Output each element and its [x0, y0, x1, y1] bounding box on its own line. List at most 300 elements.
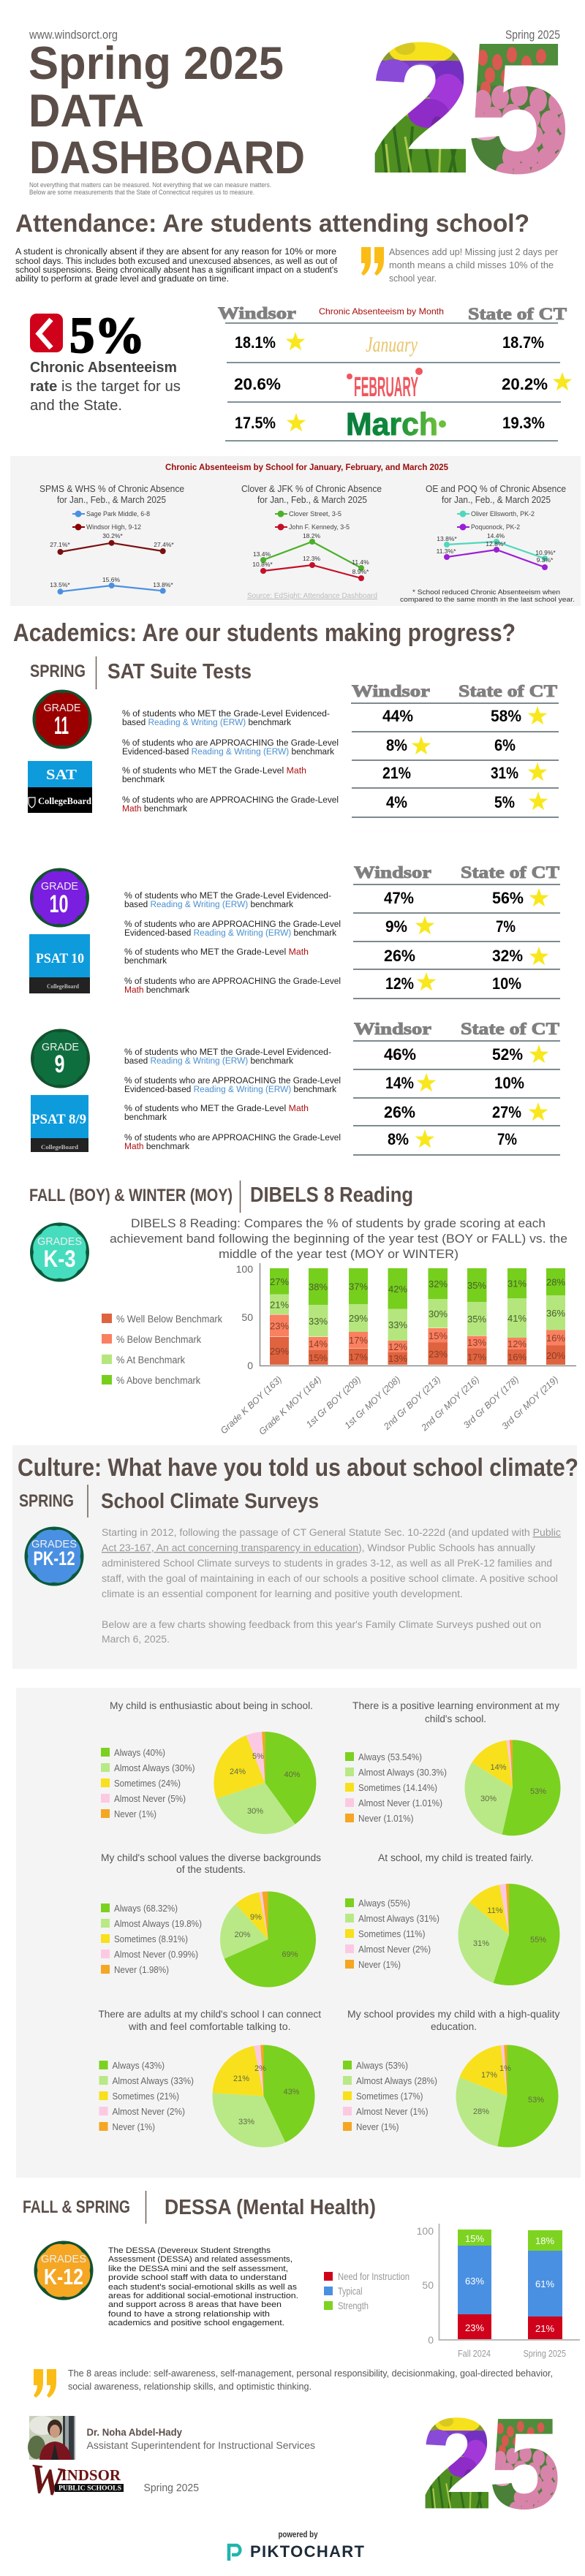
pie chart: diverse backgrounds: Never (1.98%) — [114, 1964, 169, 1975]
table: grade 11 results: 4% — [386, 793, 407, 811]
subheading: DESSA: DESSA (Mental Health) — [165, 2196, 376, 2219]
badge: grade 10 — [30, 868, 89, 927]
subheading: DIBELS: FALL (BOY) & WINTER (MOY) — [29, 1186, 233, 1205]
table: grade 10 results: 26% — [384, 947, 415, 965]
panel: chronic absenteeism by school — [10, 456, 581, 606]
eight areas callout: social awareness, relationship skills, and optimistic thinking. — [68, 2381, 312, 2392]
panel: five percent target — [30, 308, 181, 414]
issue date: Spring 2025 — [505, 28, 560, 42]
subtitle note — [29, 181, 271, 197]
author name: Dr. Noha Abdel-Hady — [86, 2426, 182, 2438]
row: January: 18.1% — [235, 333, 276, 352]
stacked bar chart: DIBELS: 1st Gr BOY (209) — [304, 1374, 363, 1430]
benchmark descriptions: grade 10 — [124, 892, 341, 995]
pie chart: treated fairly: At school, my child is treated fairly. — [378, 1852, 534, 1863]
table: grade 11 results: Windsor — [352, 682, 430, 700]
badge: grade 10: GRADE — [41, 880, 78, 893]
stacked bar chart: DIBELS: 3rd Gr BOY (178) — [461, 1374, 521, 1431]
footnote: * School reduced Chronic Absenteeism when — [412, 588, 560, 596]
table: grade 9 results: 14% — [385, 1074, 414, 1092]
pie chart: high-quality education: Never (1%) — [356, 2121, 399, 2132]
line chart: SPMS and WHS: 27.4%* — [154, 541, 174, 548]
stacked bar chart: DIBELS: 37% — [349, 1281, 368, 1292]
school climate paragraph — [102, 1527, 561, 1645]
benchmark descriptions: grade 11: benchmark — [122, 776, 165, 784]
table: grade 11 results: 21% — [382, 764, 411, 782]
table: grade 9 results: 7% — [497, 1130, 517, 1148]
attendance definition paragraph — [15, 248, 338, 284]
subheading: school climate — [19, 1485, 319, 1518]
stacked bar chart: DIBELS: Grade K MOY (164) — [257, 1374, 323, 1437]
row: January: January — [366, 333, 418, 357]
pie chart: enthusiastic: 5% — [252, 1752, 264, 1761]
badge: grades PK-12: PK-12 — [34, 1548, 75, 1569]
pie chart: diverse backgrounds: of the students. — [176, 1864, 246, 1875]
line chart: OE and POQ: 12.8%* — [486, 540, 506, 548]
pie chart: high-quality education: Always (53%) — [356, 2060, 408, 2071]
title: DATA — [29, 86, 144, 137]
DIBELS description: achievement band following the beginning of the year test (BOY or FALL) vs. the — [110, 1232, 567, 1246]
stacked bar chart: DIBELS: 27% — [270, 1276, 289, 1287]
footnote: compared to the same month in the last school year. — [400, 596, 575, 604]
attendance definition paragraph: school days. This includes both excused and unexcused absences, as well as out of — [15, 257, 338, 266]
table header: State of CT — [468, 305, 567, 323]
line chart: SPMS and WHS: Windsor High, 9-12 — [86, 523, 141, 531]
attendance definition paragraph: school suspensions. Being chronically absent has a significant impact on a student's — [15, 266, 338, 275]
pie chart: treated fairly — [345, 1852, 546, 1970]
line chart: SPMS and WHS: 30.2%* — [102, 532, 123, 539]
panel title: Chronic Absenteeism by School for January, February, and March 2025 — [165, 462, 448, 472]
chart legend: DIBELS bands — [102, 1314, 222, 1386]
stacked bar chart: DIBELS: 2nd Gr MOY (216) — [419, 1374, 481, 1433]
table: grade 10 results: 7% — [496, 917, 516, 936]
chart legend: DIBELS bands: % Above benchmark — [116, 1375, 200, 1386]
subheading: DIBELS: DIBELS 8 Reading — [250, 1183, 413, 1207]
website url: www.windsorct.org — [29, 28, 118, 42]
benchmark descriptions: grade 11: % of students who MET the Grade-Level Evidenced- — [122, 710, 330, 719]
line chart: OE and POQ: 14.4% — [487, 532, 505, 539]
DESSA description: each student's social-emotional skills as well as — [108, 2283, 297, 2292]
benchmark descriptions: grade 10: Math benchmark — [124, 986, 189, 995]
heading: academics: Academics: Are our students making progress? — [13, 619, 516, 647]
pie chart: enthusiastic: Sometimes (24%) — [114, 1778, 181, 1789]
table: grade 9 results: 46% — [384, 1045, 416, 1064]
stacked bar chart: DIBELS: 16% — [507, 1352, 526, 1363]
pie chart: high-quality education: 28% — [473, 2107, 489, 2116]
stacked bar chart: DESSA: 63% — [465, 2276, 484, 2287]
table: chronic absenteeism by month — [218, 304, 572, 442]
line chart: OE and POQ: 9.3%* — [537, 556, 554, 564]
logo: PSAT 10: PSAT 10 — [36, 951, 84, 966]
pie chart: diverse backgrounds: Always (68.32%) — [114, 1903, 178, 1914]
pie chart: learning environment: 53% — [530, 1787, 546, 1796]
line chart: Clover and JFK: for Jan., Feb., & March 2025 — [257, 495, 367, 505]
line chart: Clover and JFK: 18.2% — [303, 532, 320, 539]
chart legend: DIBELS bands: % At Benchmark — [116, 1355, 185, 1365]
pie chart: trusted adults: Never (1%) — [113, 2121, 155, 2132]
chart legend: DESSA: Need for Instruction — [338, 2271, 410, 2282]
line chart: OE and POQ: 10.9%* — [535, 549, 556, 556]
pie chart: enthusiastic: 40% — [284, 1770, 301, 1779]
line chart: Clover and JFK: 13.4% — [253, 550, 271, 558]
table: grade 11 results: State of CT — [458, 682, 557, 700]
logo: PSAT 8/9: PSAT 8/9 — [31, 1112, 86, 1127]
footer date: Spring 2025 — [143, 2482, 199, 2494]
stacked bar chart: DIBELS: 36% — [546, 1308, 565, 1319]
chart legend: DIBELS bands: % Below Benchmark — [116, 1334, 201, 1345]
badge: grade 9: 9 — [54, 1050, 64, 1078]
icon: less-than badge — [30, 314, 63, 352]
pie chart: trusted adults: Almost Always (33%) — [113, 2075, 194, 2086]
row: March — [235, 406, 545, 442]
row: February — [234, 368, 572, 403]
logo: PSAT 10: CollegeBoard — [47, 982, 79, 990]
line chart: SPMS and WHS: Sage Park Middle, 6-8 — [86, 510, 150, 518]
stacked bar chart: DIBELS: 16% — [546, 1333, 565, 1344]
pie chart: enthusiastic: Never (1%) — [114, 1808, 156, 1819]
logo: Windsor Public Schools: INDSOR — [61, 2466, 121, 2484]
line chart: Clover and JFK: Clover Street, 3-5 — [289, 510, 341, 518]
benchmark descriptions: grade 11 — [122, 710, 339, 814]
school climate paragraph: staff, with the goal of maintaining in each of our schools a positive school climate. A positive school — [102, 1573, 558, 1584]
pie chart: trusted adults: 43% — [283, 2088, 300, 2096]
school climate paragraph: Starting in 2012, following the passage of CT General Statute Sec. 10-222d (and updated with Public — [102, 1527, 561, 1538]
logo: PSAT 10 — [29, 934, 90, 993]
eight areas callout — [68, 2368, 553, 2392]
pie chart: enthusiastic: Always (40%) — [114, 1747, 165, 1758]
school climate paragraph: Below are a few charts showing feedback from this year's Family Climate Surveys pushed out on — [102, 1619, 541, 1630]
pie chart: enthusiastic: 30% — [247, 1807, 263, 1816]
DESSA description: The DESSA (Devereux Student Strengths — [108, 2246, 271, 2255]
target text — [30, 360, 181, 414]
table: grade 10 results: State of CT — [461, 863, 559, 882]
pie chart: learning environment: Almost Always (30.3%) — [358, 1767, 447, 1778]
heading: attendance: Attendance: Are students attending school? — [15, 210, 529, 238]
stacked bar chart: DIBELS: 3rd Gr MOY (219) — [499, 1374, 560, 1431]
benchmark descriptions: grade 11: based Reading & Writing (ERW) benchmark — [122, 719, 291, 727]
table: grade 11 results: 31% — [491, 764, 518, 782]
pie chart: treated fairly: Never (1%) — [358, 1959, 401, 1970]
school climate paragraph: March 6, 2025. — [102, 1634, 170, 1645]
panel: family survey pie charts — [16, 1688, 581, 2178]
title: Spring 2025 — [29, 38, 284, 89]
line chart: OE and POQ: 11.3%* — [437, 548, 456, 555]
footnote — [400, 588, 575, 604]
badge: grade 9: GRADE — [42, 1041, 79, 1053]
pie chart: treated fairly: 31% — [473, 1939, 489, 1948]
DESSA description: like the DESSA mini and the self assessment, — [108, 2265, 288, 2273]
pie chart: trusted adults — [98, 2009, 321, 2132]
table: grade 10 results: 47% — [384, 889, 414, 907]
stacked bar chart: DIBELS: 17% — [349, 1352, 368, 1363]
eight areas callout: The 8 areas include: self-awareness, self-management, personal responsibility, decisionmaking, goal-directed behavior, — [68, 2368, 553, 2379]
pie chart: diverse backgrounds: Almost Never (0.99%) — [114, 1949, 198, 1960]
stacked bar chart: DIBELS: 0 — [247, 1360, 253, 1371]
benchmark descriptions: grade 10: based Reading & Writing (ERW) benchmark — [124, 901, 293, 909]
flower-filled numeral 25, footer: 2 — [422, 2393, 493, 2534]
table: grade 9 results: 52% — [492, 1045, 523, 1064]
row: February: 20.6% — [234, 375, 281, 393]
badge: grade 11: 11 — [54, 712, 69, 740]
pie chart: diverse backgrounds: 69% — [282, 1950, 298, 1959]
benchmark descriptions: grade 11: % of students who are APPROACHING the Grade-Level — [122, 739, 339, 748]
table: grade 9 results: 27% — [492, 1103, 521, 1121]
table: grade 9 results: 8% — [388, 1130, 409, 1148]
subheading: DESSA: FALL & SPRING — [23, 2197, 130, 2217]
stacked bar chart: DESSA: 100 — [417, 2225, 434, 2237]
badge: grade 11: GRADE — [44, 702, 80, 714]
pie chart: trusted adults: with and feel comfortable talking to. — [128, 2021, 291, 2032]
badge: grade 10: 10 — [50, 890, 69, 918]
line chart: SPMS and WHS: 15.6% — [102, 576, 120, 583]
subheading: DESSA — [23, 2191, 376, 2224]
benchmark descriptions: grade 9: % of students who are APPROACHING the Grade-Level — [124, 1134, 341, 1143]
line chart: OE and POQ: OE and POQ % of Chronic Absence — [426, 484, 566, 494]
line chart: OE and POQ: 13.8%* — [437, 535, 457, 542]
subtitle note: Not everything that matters can be measured. Not everything that we can measure matters. — [29, 181, 271, 189]
row: February: 20.2% — [502, 375, 548, 393]
stacked bar chart: DESSA: 18% — [535, 2235, 554, 2246]
pie chart: high-quality education: Sometimes (17%) — [356, 2091, 423, 2102]
pie chart: high-quality education: My school provides my child with a high-quality — [347, 2009, 560, 2020]
benchmark descriptions: grade 9: Evidenced-based Reading & Writing (ERW) benchmark — [124, 1086, 336, 1094]
powered by Piktochart — [229, 2531, 365, 2561]
pie chart: high-quality education: 17% — [481, 2071, 497, 2080]
pie chart: trusted adults: 21% — [233, 2075, 249, 2083]
pie chart: treated fairly: Almost Never (2%) — [358, 1944, 431, 1955]
source link: Source: EdSight: Attendance Dashboard — [247, 592, 377, 600]
stacked bar chart: DESSA: 23% — [465, 2322, 484, 2333]
attendance callout: Absences add up! Missing just 2 days per — [389, 246, 559, 257]
stacked bar chart: DIBELS: 12% — [388, 1341, 407, 1352]
flower-filled numeral 25, footer: 5 — [489, 2393, 560, 2534]
stacked bar chart: DIBELS: 13% — [388, 1353, 407, 1364]
pie chart: trusted adults: Sometimes (21%) — [113, 2091, 179, 2102]
benchmark descriptions: grade 10: % of students who MET the Grade-Level Evidenced- — [124, 892, 331, 901]
subheading: SAT suite: SAT Suite Tests — [107, 660, 252, 683]
benchmark descriptions: grade 10: % of students who MET the Grade-Level Math — [124, 948, 309, 957]
row: March: 19.3% — [502, 414, 545, 432]
benchmark descriptions: grade 11: Evidenced-based Reading & Writing (ERW) benchmark — [122, 748, 334, 757]
badge: grades PK-12 — [25, 1526, 83, 1586]
table: grade 10 results: 10% — [492, 974, 521, 993]
flower-filled numeral 25 — [370, 6, 569, 210]
badge: grade 11 — [32, 690, 92, 749]
logo: SAT College Board: SAT — [46, 767, 78, 783]
table: grade 10 results — [353, 863, 560, 999]
pie chart: learning environment — [345, 1700, 559, 1824]
pie chart: diverse backgrounds: Almost Always (19.8%) — [114, 1918, 202, 1929]
badge: grades K-3: GRADES — [37, 1235, 82, 1248]
stacked bar chart: DIBELS — [219, 1263, 576, 1437]
pie chart: learning environment: child's school. — [425, 1713, 486, 1724]
pie chart: trusted adults: Almost Never (2%) — [113, 2106, 185, 2117]
icon: quote mark — [361, 247, 384, 276]
attendance callout — [389, 246, 559, 284]
logo: Windsor Public Schools: PUBLIC SCHOOLS — [58, 2485, 121, 2493]
logo: Windsor Public Schools: W — [27, 2455, 67, 2505]
line chart: SPMS and WHS: 13.8%* — [153, 581, 173, 588]
table: grade 10 results: 9% — [385, 917, 407, 936]
author name: Assistant Superintendent for Instructional Services — [86, 2440, 315, 2451]
pie chart: diverse backgrounds: 9% — [250, 1913, 262, 1922]
DESSA description: provide school staff with data to understand — [108, 2273, 287, 2282]
stacked bar chart: DIBELS: 31% — [507, 1278, 526, 1289]
badge: grades K-3 — [30, 1222, 89, 1282]
DIBELS description — [110, 1216, 567, 1261]
stacked bar chart: DIBELS: 29% — [270, 1346, 289, 1357]
pie chart: treated fairly: Always (55%) — [358, 1898, 410, 1909]
subheading: SAT suite: SPRING — [30, 662, 86, 681]
stacked bar chart: DIBELS: 35% — [467, 1314, 486, 1325]
pie chart: learning environment: 30% — [480, 1795, 497, 1803]
DESSA description: areas for additional social-emotional instruction. — [108, 2292, 298, 2300]
row: February: FEBRUARY — [354, 372, 418, 403]
stacked bar chart: DIBELS: 41% — [507, 1313, 526, 1324]
line chart: Clover and JFK: 12.3% — [303, 555, 320, 562]
flower-filled numeral 25: 2 — [370, 6, 472, 210]
line chart: OE and POQ: for Jan., Feb., & March 2025 — [442, 495, 551, 505]
table: grade 10 results: 56% — [492, 889, 524, 907]
table: grade 9 results — [353, 1020, 560, 1155]
table: grade 9 results: Windsor — [354, 1020, 431, 1038]
line chart: OE and POQ: Poquonock, PK-2 — [471, 523, 520, 531]
table header — [218, 304, 567, 323]
title — [29, 38, 305, 183]
school climate paragraph: administered School Climate surveys to students in grades 3-12, as well as all PreK-12 families and — [102, 1558, 552, 1569]
row: March: March — [346, 406, 438, 442]
stacked bar chart: DIBELS: 42% — [388, 1284, 407, 1295]
target text: Chronic Absenteeism — [30, 360, 177, 376]
table header: Chronic Absenteeism by Month — [319, 306, 444, 317]
table header: Windsor — [218, 304, 296, 322]
line chart: SPMS and WHS: 13.5%* — [50, 581, 70, 588]
stacked bar chart: DESSA: 21% — [535, 2323, 554, 2334]
stacked bar chart: DESSA: 61% — [535, 2278, 554, 2289]
DESSA description: Assessment (DESSA) and related assessments, — [108, 2255, 292, 2264]
pie chart: enthusiastic — [101, 1700, 313, 1819]
chart legend: DIBELS bands: % Well Below Benchmark — [116, 1314, 222, 1325]
DIBELS description: DIBELS 8 Reading: Compares the % of students by grade scoring at each — [131, 1216, 546, 1230]
pie chart: learning environment: Almost Never (1.01%) — [358, 1797, 442, 1808]
subtitle note: Below are some measurements that the State of Connecticut requires us to measure. — [29, 189, 254, 197]
pie chart: enthusiastic: 24% — [230, 1768, 246, 1776]
badge: grades K-3: K-3 — [44, 1246, 76, 1272]
pie chart: diverse backgrounds: 20% — [234, 1931, 251, 1939]
line chart: SPMS and WHS: 27.1%* — [50, 541, 70, 548]
logo: PSAT 8/9: CollegeBoard — [41, 1143, 78, 1151]
pie chart: diverse backgrounds: My child's school values the diverse backgrounds — [101, 1852, 321, 1863]
badge: grades K-12 — [34, 2241, 94, 2300]
benchmark descriptions: grade 9: based Reading & Writing (ERW) benchmark — [124, 1057, 293, 1066]
pie chart: diverse backgrounds — [101, 1852, 321, 1975]
pie chart: high-quality education: 1% — [499, 2064, 511, 2073]
badge: grade 9 — [31, 1029, 90, 1088]
stacked bar chart: DESSA: Spring 2025 — [524, 2349, 566, 2359]
benchmark descriptions: grade 9: % of students who are APPROACHING the Grade-Level — [124, 1077, 341, 1086]
powered by Piktochart: powered by — [278, 2531, 318, 2539]
line chart: OE and POQ: Oliver Ellsworth, PK-2 — [471, 510, 535, 518]
panel: culture section — [12, 1445, 578, 1669]
pie chart: high-quality education: Almost Never (1%) — [356, 2106, 429, 2117]
DESSA description: academics and positive school engagement. — [108, 2319, 284, 2327]
stacked bar chart: DIBELS: 28% — [546, 1276, 565, 1288]
logo: SAT College Board: CollegeBoard — [38, 795, 92, 806]
table: grade 11 results: 8% — [386, 736, 407, 754]
line chart: SPMS and WHS: for Jan., Feb., & March 2025 — [57, 495, 166, 505]
pie chart: treated fairly: Sometimes (11%) — [358, 1928, 426, 1939]
pie chart: enthusiastic: Almost Always (30%) — [114, 1762, 195, 1773]
line chart: SPMS and WHS — [39, 484, 184, 594]
stacked bar chart: DESSA: 50 — [422, 2279, 434, 2291]
attendance callout: month means a child misses 10% of the — [389, 260, 554, 270]
badge: grades PK-12: GRADES — [31, 1538, 77, 1550]
line chart: Clover and JFK: 8.9%* — [352, 568, 369, 575]
pie chart: enthusiastic: Almost Never (5%) — [114, 1793, 186, 1804]
attendance callout: school year. — [389, 273, 437, 284]
stacked bar chart: DIBELS: 12% — [507, 1338, 526, 1349]
pie chart: high-quality education: 53% — [528, 2096, 544, 2105]
stacked bar chart: DIBELS: 2nd Gr BOY (213) — [381, 1374, 442, 1432]
pie chart: learning environment: Always (53.54%) — [358, 1751, 422, 1762]
school climate paragraph: Act 23-167, An act concerning transparency in education ), Windsor Public Schools has annually — [102, 1542, 535, 1553]
pie chart: learning environment: Sometimes (14.14%) — [358, 1782, 437, 1793]
stacked bar chart: DIBELS: Grade K BOY (163) — [219, 1374, 284, 1436]
stacked bar chart: DIBELS: 21% — [270, 1300, 289, 1310]
DIBELS description: middle of the year test (MOY or WINTER) — [219, 1247, 458, 1261]
school climate paragraph: climate is an essential component for learning and positive youth development. — [102, 1588, 463, 1599]
row: March: 17.5% — [235, 414, 276, 432]
benchmark descriptions: grade 10: benchmark — [124, 957, 167, 966]
pie chart: enthusiastic: My child is enthusiastic about being in school. — [110, 1700, 313, 1711]
stacked bar chart: DIBELS: 33% — [388, 1319, 407, 1330]
table: grade 9 results: State of CT — [461, 1020, 559, 1038]
icon: quote mark — [34, 2369, 56, 2398]
DESSA description: and support across 8 areas that have been — [108, 2300, 282, 2309]
table: grade 11 results: 58% — [491, 707, 521, 725]
benchmark descriptions: grade 11: Math benchmark — [122, 805, 187, 814]
stacked bar chart: DIBELS: 13% — [467, 1337, 486, 1348]
flower-filled numeral 25: 5 — [467, 6, 569, 210]
target text: rate is the target for us — [30, 379, 181, 395]
pie chart: learning environment: 14% — [490, 1763, 507, 1772]
pie chart: high-quality education: Almost Always (28%) — [356, 2075, 437, 2086]
line chart: OE and POQ — [426, 484, 566, 570]
line chart: Clover and JFK: 11.4% — [352, 558, 369, 566]
table: grade 11 results: 6% — [494, 736, 516, 754]
subheading: SAT suite — [30, 656, 252, 689]
stacked bar chart: DIBELS: 17% — [349, 1335, 368, 1346]
title: DASHBOARD — [29, 132, 305, 183]
line chart: Clover and JFK: Clover & JFK % of Chronic Absence — [241, 484, 382, 494]
stacked bar chart: DESSA: Fall 2024 — [458, 2349, 491, 2359]
stacked bar chart: DIBELS: 33% — [309, 1316, 328, 1327]
pie chart: learning environment: There is a positive learning environment at my — [352, 1700, 559, 1711]
stacked bar chart: DIBELS: 17% — [467, 1352, 486, 1363]
stacked bar chart: DIBELS: 20% — [546, 1350, 565, 1361]
logo: SAT College Board — [28, 761, 92, 813]
author name — [86, 2426, 315, 2451]
pie chart: trusted adults: Always (43%) — [113, 2060, 165, 2071]
subheading: DIBELS — [29, 1181, 413, 1213]
stacked bar chart: DIBELS: 23% — [270, 1320, 289, 1332]
attendance definition paragraph: A student is chronically absent if they are absent for any reason for 10% or more — [15, 248, 336, 257]
table: grade 9 results: 26% — [384, 1103, 415, 1121]
stacked bar chart: DIBELS: 32% — [429, 1278, 448, 1289]
pie chart: treated fairly: 55% — [530, 1936, 546, 1944]
stacked bar chart: DIBELS: 50 — [241, 1311, 253, 1323]
subheading: school climate: SPRING — [19, 1491, 74, 1511]
